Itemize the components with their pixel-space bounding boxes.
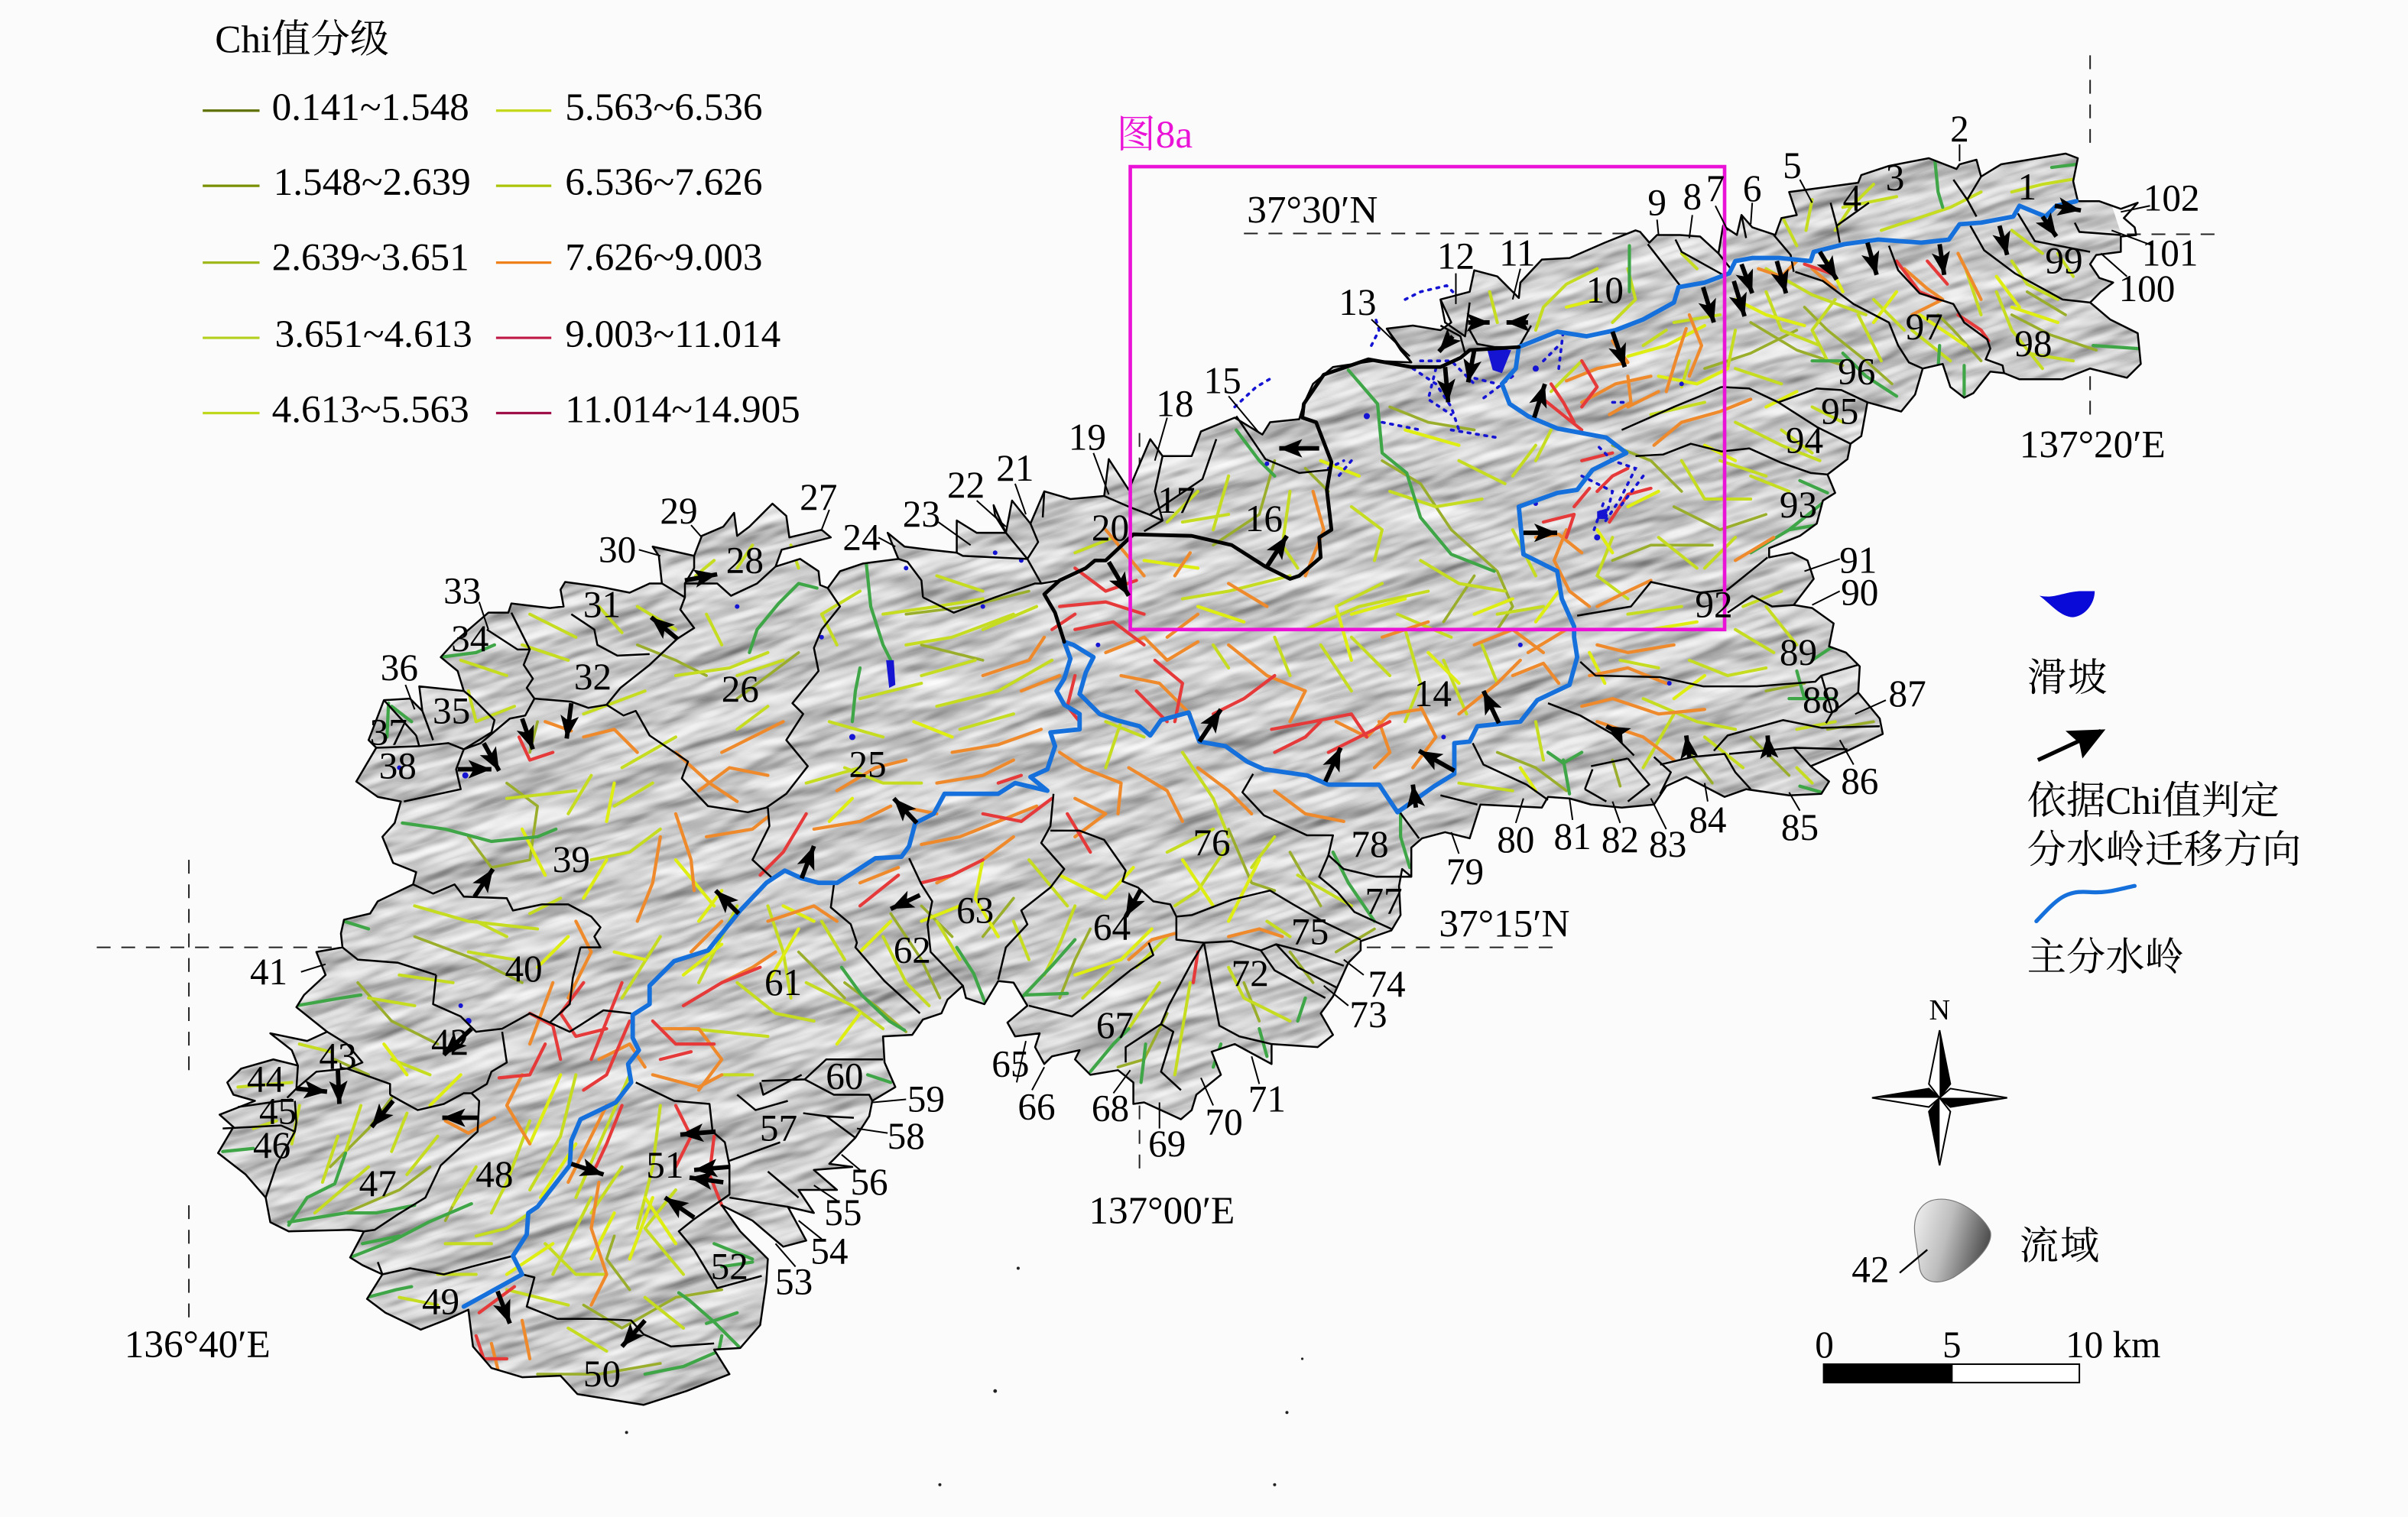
- basin number labels: 58: [888, 1115, 925, 1157]
- basin number labels: 74: [1368, 963, 1406, 1005]
- basin number labels: 46: [253, 1124, 290, 1166]
- basin number labels: 64: [1093, 906, 1131, 948]
- basin number labels: 83: [1649, 823, 1686, 865]
- basin number labels: 93: [1780, 484, 1817, 526]
- basin number labels: 23: [903, 493, 940, 535]
- basin number labels: 7: [1706, 167, 1725, 209]
- basin number labels: 6: [1743, 167, 1761, 209]
- basin number labels: 61: [764, 961, 802, 1003]
- basin number labels: 12: [1437, 235, 1475, 277]
- basin number labels: 37: [370, 711, 407, 753]
- basin number labels: 18: [1156, 383, 1193, 425]
- basin number labels: 51: [646, 1144, 683, 1186]
- basin number labels: 97: [1906, 306, 1943, 348]
- basin number labels: 101: [2142, 232, 2199, 274]
- scale bar: [1815, 1324, 2160, 1383]
- basin number labels: 95: [1821, 391, 1858, 433]
- basin number labels: 80: [1497, 818, 1534, 861]
- basin number labels: 53: [775, 1261, 813, 1303]
- basin number labels: 79: [1446, 851, 1484, 893]
- basin number labels: 78: [1351, 823, 1389, 865]
- basin number labels: 45: [259, 1091, 297, 1133]
- basin number labels: 55: [824, 1191, 862, 1233]
- basin number labels: 4: [1842, 177, 1861, 219]
- coordinate labels: 37°30′N: [1247, 188, 1378, 232]
- basin number labels: 11: [1499, 232, 1536, 274]
- basin number labels: 24: [842, 516, 881, 558]
- basin number labels: 21: [996, 447, 1034, 489]
- legend swatch: 9.003~11.014: 9.003~11.014: [565, 313, 780, 356]
- basin number labels: 19: [1069, 417, 1106, 459]
- basin number labels: 85: [1781, 806, 1819, 848]
- basin number labels: 5: [1783, 144, 1802, 186]
- streams: red highest Chi: [476, 261, 1989, 1359]
- main drainage divide: blue line: [464, 201, 2076, 1307]
- scale bar: 10 km: [2066, 1324, 2160, 1366]
- leader lines from basin numbers to basins: [301, 144, 2153, 1266]
- basin number labels: 22: [947, 464, 985, 506]
- figure 8a extent: magenta rectangle: [1131, 167, 1725, 630]
- basin number labels: 3: [1886, 157, 1904, 199]
- basin number labels: 102: [2144, 177, 2200, 219]
- basin number labels: 99: [2045, 240, 2083, 282]
- legend: main divide: 主分水岭: [2027, 936, 2184, 980]
- basin number labels: 72: [1232, 952, 1269, 994]
- compass rose: [1872, 994, 2007, 1165]
- map: basin boundaries: [222, 177, 2121, 1347]
- landslides: blue patches on the map: [397, 286, 1684, 1024]
- legend swatch: 11.014~14.905: 11.014~14.905: [565, 388, 800, 432]
- basin number labels: 68: [1092, 1088, 1129, 1130]
- map: stream network coloured by Chi value: [222, 161, 2137, 1382]
- figure 8a label: 图8a: [1116, 113, 1193, 157]
- legend: landslide: 滑坡: [2027, 656, 2108, 700]
- basin number labels: 100: [2119, 267, 2175, 310]
- legend swatch: 7.626~9.003: 7.626~9.003: [565, 236, 762, 280]
- scattered specks below the map: [625, 1266, 1303, 1486]
- basin number labels: 65: [991, 1042, 1029, 1084]
- migration arrows: divide migration direction: [297, 206, 2081, 1347]
- basin number labels: 15: [1204, 359, 1241, 401]
- scale bar: 5: [1942, 1324, 1962, 1366]
- basin number labels: 82: [1602, 818, 1639, 861]
- coordinate labels: [125, 188, 2166, 1366]
- basin number labels: 71: [1248, 1078, 1286, 1120]
- basin number labels: 56: [850, 1161, 888, 1203]
- basin number labels: 20: [1092, 507, 1129, 549]
- basin number labels: 98: [2014, 323, 2052, 365]
- streams: olive low Chi: [330, 292, 2096, 1374]
- basin number labels: 9: [1647, 181, 1666, 223]
- basin number labels: 90: [1841, 572, 1878, 614]
- basin number labels: 60: [826, 1055, 864, 1097]
- coordinate labels: 37°15′N: [1439, 903, 1569, 946]
- compass rose: N: [1929, 994, 1950, 1026]
- legend: basin: [1851, 1199, 2101, 1291]
- basin number labels: 91: [1839, 539, 1877, 581]
- basin number labels: 66: [1017, 1086, 1056, 1128]
- map: shaded relief terrain: [219, 154, 2140, 1404]
- basin number labels: 47: [359, 1162, 397, 1204]
- basin number labels: 30: [599, 528, 636, 570]
- streams: orange high Chi: [446, 254, 1981, 1382]
- legend: main divide: [2027, 886, 2184, 980]
- legend: migration direction arrow: 分水岭迁移方向: [2027, 828, 2301, 872]
- legend: Chi value classes: [203, 18, 800, 432]
- legend swatch: 6.536~7.626: 6.536~7.626: [565, 160, 762, 204]
- basin number labels: 70: [1206, 1101, 1243, 1143]
- basin number labels: 36: [381, 647, 418, 689]
- basin number labels: 2: [1950, 108, 1969, 150]
- basin number labels: 88: [1803, 679, 1840, 721]
- basin number labels: 41: [250, 951, 287, 993]
- legend swatch: 3.651~4.613: 3.651~4.613: [275, 313, 472, 356]
- basin number labels: 1: [2017, 166, 2036, 208]
- basin number labels: 39: [553, 838, 590, 880]
- basin number labels: 10: [1586, 269, 1624, 311]
- basin number labels: 76: [1193, 822, 1231, 864]
- basin number labels: 87: [1888, 673, 1926, 715]
- basin number labels: 38: [379, 745, 417, 787]
- streams: bright yellow: [384, 215, 2058, 1274]
- basin number labels: 8: [1683, 175, 1702, 217]
- legend: basin: 流域: [2020, 1224, 2101, 1268]
- basin number labels: [247, 108, 2200, 1395]
- basin number labels: 43: [319, 1035, 357, 1077]
- basin number labels: 49: [422, 1281, 459, 1323]
- graticule: dashed coordinate lines: [97, 55, 2215, 1318]
- legend swatch: 4.613~5.563: 4.613~5.563: [272, 388, 469, 432]
- basin number labels: 92: [1695, 584, 1733, 626]
- basin number labels: 63: [956, 889, 994, 931]
- basin number labels: 48: [475, 1153, 513, 1195]
- basin number labels: 69: [1148, 1123, 1186, 1165]
- basin number labels: 86: [1841, 760, 1878, 802]
- basin number labels: 59: [907, 1078, 945, 1120]
- streams: green lowest Chi: [222, 161, 2137, 1374]
- basin number labels: 13: [1339, 281, 1376, 323]
- basin number labels: 26: [722, 668, 759, 710]
- basin number labels: 17: [1157, 479, 1195, 521]
- basin number labels: 52: [711, 1246, 748, 1288]
- legend: migration direction arrow: [2027, 729, 2301, 872]
- legend swatch: 2.639~3.651: 2.639~3.651: [272, 236, 469, 280]
- basin number labels: 67: [1096, 1004, 1134, 1046]
- basin number labels: 54: [810, 1230, 848, 1272]
- legend: basin: 42: [1851, 1249, 1889, 1291]
- basin number labels: 44: [247, 1058, 284, 1100]
- basin number labels: 14: [1414, 673, 1452, 715]
- legend: landslide: [2027, 592, 2108, 700]
- basin number labels: 42: [431, 1021, 469, 1063]
- basin number labels: 40: [505, 948, 543, 990]
- basin number labels: 16: [1245, 498, 1283, 540]
- basin number labels: 89: [1780, 631, 1817, 673]
- basin number labels: 81: [1554, 815, 1592, 857]
- basin number labels: 33: [443, 570, 481, 612]
- legend swatch: 1.548~2.639: 1.548~2.639: [274, 160, 471, 204]
- basin number labels: 29: [660, 490, 698, 532]
- basin number labels: 25: [849, 744, 887, 786]
- legend title: Chi值分级: [215, 18, 389, 61]
- basin number labels: 73: [1349, 994, 1387, 1036]
- basin number labels: 62: [894, 929, 931, 971]
- basin number labels: 27: [800, 476, 837, 518]
- basin number labels: 28: [726, 539, 764, 581]
- basin number labels: 50: [583, 1353, 621, 1395]
- basin number labels: 57: [760, 1107, 797, 1149]
- scale bar: 0: [1815, 1324, 1834, 1366]
- basin number labels: 35: [433, 689, 470, 731]
- basin number labels: 77: [1365, 880, 1403, 922]
- basin number labels: 31: [583, 584, 621, 626]
- basin number labels: 94: [1786, 420, 1823, 462]
- basin number labels: 34: [451, 617, 488, 660]
- basin number labels: 32: [574, 656, 612, 698]
- legend swatch: 5.563~6.536: 5.563~6.536: [565, 86, 762, 129]
- coordinate labels: 136°40′E: [125, 1323, 271, 1366]
- coordinate labels: 137°20′E: [2020, 423, 2166, 467]
- map: coastline outline: [218, 154, 2140, 1405]
- basin number labels: 84: [1689, 799, 1727, 841]
- coordinate labels: 137°00′E: [1089, 1189, 1235, 1233]
- legend swatch: 0.141~1.548: 0.141~1.548: [272, 86, 469, 129]
- streams: yellow-green mid Chi: [238, 177, 2088, 1351]
- legend: migration direction arrow: 依据Chi值判定: [2027, 780, 2280, 823]
- basin number labels: 96: [1838, 350, 1875, 392]
- basin number labels: 75: [1291, 911, 1329, 953]
